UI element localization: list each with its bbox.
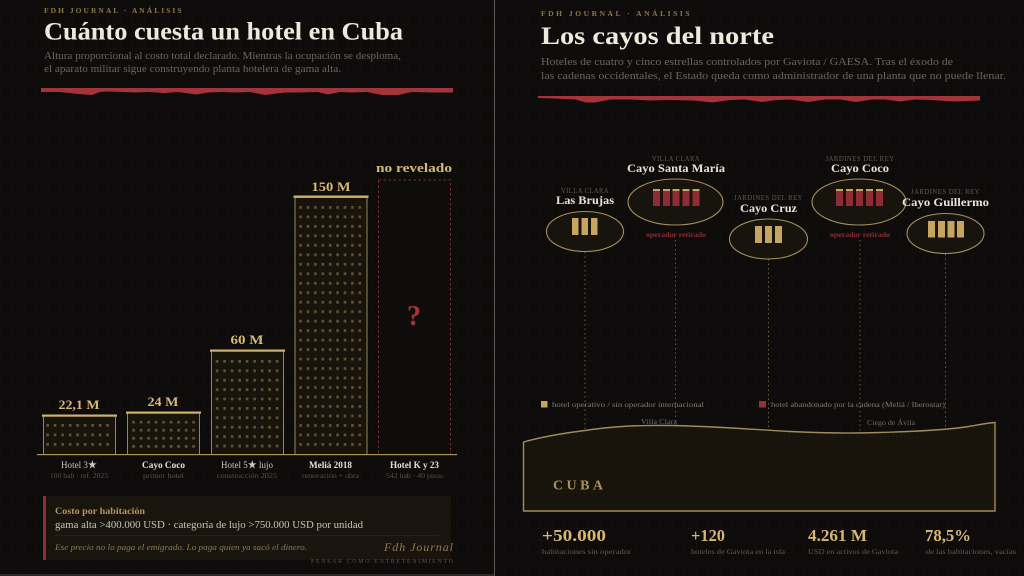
key: Cayo Guillermo [902,188,989,254]
stat: empty rooms: de las habitaciones, vacías [926,547,1016,556]
key: Cayo Coco: operador retirado [830,231,891,239]
stat: Gaviota hotels: hoteles de Gaviota en la isla [691,547,786,556]
key: Cayo Guillermo: Cayo Guillermo [902,197,989,209]
left subtitle: Altura proporcional al costo total declarado. Mientras la ocupación se desploma, [44,51,401,62]
key: Cayo Cruz [730,194,808,259]
building labels: primer hotel [143,472,184,480]
building: Meliá 2018: 150 M [312,179,350,194]
legend: hotel operativo / sin operador internacional [552,400,704,409]
stat: empty rooms: 78,5% [925,526,971,545]
stat: rooms without operator: habitaciones sin operador [542,547,632,556]
key: Cayo Santa María: operador retirado [646,231,707,239]
stat: Gaviota assets [808,526,899,556]
left subtitle [44,51,401,75]
building: Meliá 2018 [294,179,368,454]
right subtitle: las cadenas occidentales, el Estado queda como administrador de una planta que no puede llenar. [541,71,1006,82]
key: Cayo Santa María: Cayo Santa María [627,163,725,175]
stat: empty rooms [925,526,1016,556]
building labels: Hotel 3★ [61,460,97,471]
map: Cuba [524,417,995,511]
building: Cayo Coco [126,394,201,454]
stat: Gaviota assets: 4.261 M [808,526,867,545]
stat: Gaviota hotels: +120 [691,526,725,545]
building: Cayo Coco: 24 M [148,394,178,409]
building: Hotel 5 estrellas lujo [210,332,285,454]
stat: rooms without operator [542,526,632,556]
key: Cayo Coco: Cayo Coco [831,163,889,175]
key: Cayo Santa María: VILLA CLARA [652,155,700,163]
map: Cuba: Villa Clara [641,417,678,426]
building labels: construcción 2025 [217,472,278,480]
building: Hotel 3 estrellas [42,397,117,454]
right subtitle [541,57,1006,82]
building: Hotel K y 23 undisclosed: no revelado [376,160,452,175]
right eyebrow: FDH JOURNAL · ANÁLISIS [541,8,691,18]
map: Cuba: CUBA [553,478,604,494]
building labels: Hotel 5★ lujo [221,460,273,471]
key: Las Brujas: VILLA CLARA [561,187,609,195]
building: Hotel K y 23 undisclosed [376,160,452,454]
building: Hotel K y 23 undisclosed: ? [407,301,421,332]
building labels [50,460,443,480]
baseline [37,454,457,455]
building labels: Meliá 2018 [309,461,352,471]
right red torn stripe [538,96,980,102]
stat: Gaviota hotels [691,526,786,556]
bar chart: hotel buildings [37,160,457,455]
callout: cost per room [43,496,451,560]
building labels: Cayo Coco [142,461,185,471]
building labels: renovación + obra [302,472,360,480]
connector lines [585,240,946,433]
right subtitle: Hoteles de cuatro y cinco estrellas controlados por Gaviota / GAESA. Tras el éxodo de [541,57,953,68]
key: Cayo Cruz: JARDINES DEL REY [734,194,803,202]
building labels: 100 hab · ref. 2025 [50,472,109,480]
left red torn stripe [41,88,453,95]
brand signature [311,540,454,565]
key: Las Brujas [546,187,624,252]
panel: northern keys [524,8,1016,556]
key: Las Brujas: Las Brujas [556,195,615,207]
brand signature: PENSAR COMO ENTRETENIMIENTO [311,559,454,565]
key: Cayo Cruz: Cayo Cruz [740,203,797,215]
stat: Gaviota assets: USD en activos de Gaviota [808,547,899,556]
map: Cuba: Ciego de Ávila [867,417,916,427]
left eyebrow: FDH JOURNAL · ANÁLISIS [44,5,183,15]
legend [541,400,946,409]
panel: hotel costs [37,5,457,565]
left subtitle: el aparato militar sigue construyendo planta hotelera de gama alta. [44,64,341,75]
building labels: Hotel K y 23 [390,461,439,471]
building: Hotel 3 estrellas: 22,1 M [58,397,100,412]
building: Hotel 5 estrellas lujo: 60 M [230,332,264,347]
legend: hotel abandonado por la cadena (Meliá / Iberostar) [771,400,946,409]
callout: cost per room: Costo por habitación [55,506,145,516]
callout: cost per room: gama alta >400.000 USD · categoría de lujo >750.000 USD por unidad [55,520,363,531]
key: Cayo Coco [812,155,906,239]
building labels: 542 hab · 40 pisos [386,472,443,480]
callout: cost per room: Ese precio no lo paga el emigrado. Lo paga quien ya sacó el dinero. [54,543,307,552]
key: Cayo Coco: JARDINES DEL REY [826,155,894,163]
right title: Los cayos del norte [541,23,774,50]
key: Cayo Guillermo: JARDINES DEL REY [911,188,980,196]
left title: Cuánto cuesta un hotel en Cuba [44,18,404,46]
stat: rooms without operator: +50.000 [542,526,606,545]
key: Cayo Santa María [627,155,725,239]
brand signature: Fdh Journal [383,540,454,554]
